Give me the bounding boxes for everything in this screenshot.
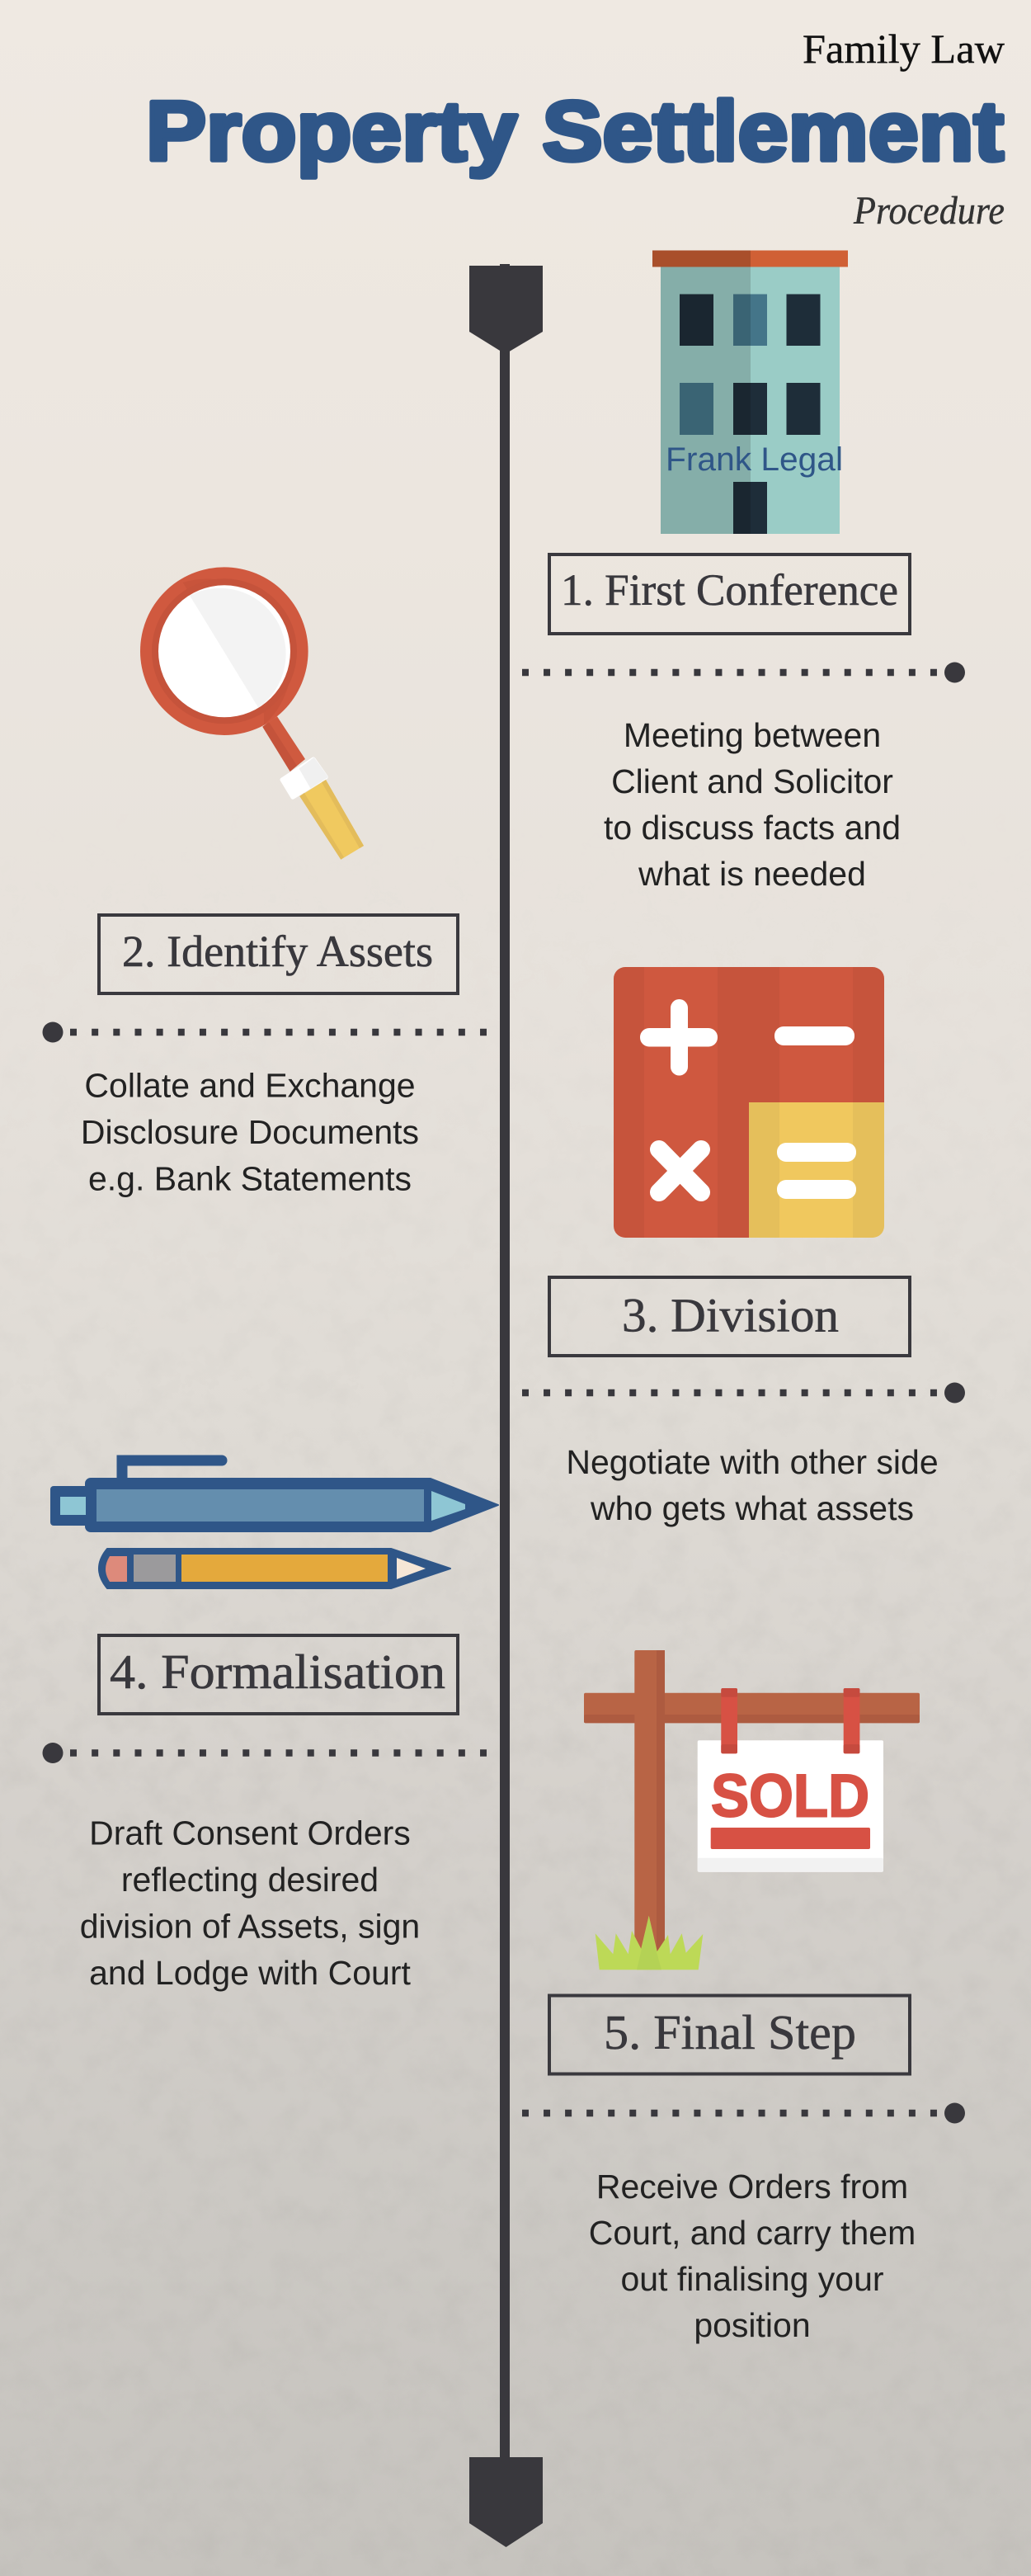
- step 5 text: position: [694, 2306, 811, 2344]
- icon: pen and pencil: [50, 1460, 498, 1588]
- step 5 connector: [522, 2102, 965, 2124]
- step 5 heading: 5. Final Step: [604, 2005, 856, 2059]
- step 4 text: [80, 1814, 420, 1992]
- step 4 connector: [43, 1743, 487, 1763]
- title: Property Settlement: [146, 84, 1004, 178]
- icon: calculator: [614, 967, 884, 1238]
- step 1 text: [604, 716, 901, 893]
- step 3 text: [566, 1443, 939, 1527]
- step 2 heading: [99, 915, 458, 993]
- step 1 heading: 1. First Conference: [561, 565, 898, 615]
- step 5 text: Court, and carry them: [589, 2214, 916, 2252]
- step 2 heading: 2. Identify Assets: [122, 927, 433, 976]
- step 3 connector: [522, 1383, 965, 1403]
- sign text: SOLD: [711, 1763, 869, 1830]
- timeline pole with arrowheads: [469, 264, 543, 2547]
- step 1 text: Client and Solicitor: [611, 762, 893, 800]
- step 4 text: Draft Consent Orders: [89, 1814, 411, 1852]
- step 4 heading: [99, 1635, 458, 1714]
- step 5 text: out finalising your: [620, 2260, 884, 2298]
- subtitle: Family Law: Family Law: [803, 26, 1005, 72]
- step 2 text: Collate and Exchange: [84, 1066, 416, 1104]
- step 2 connector: [43, 1021, 487, 1043]
- step 5 text: [589, 2168, 916, 2344]
- step 2 text: Disclosure Documents: [81, 1113, 419, 1151]
- step 5 heading: [549, 1995, 910, 2074]
- step 5 text: Receive Orders from: [596, 2168, 908, 2206]
- step 3 heading: 3. Division: [622, 1289, 839, 1342]
- step 1 connector: [522, 662, 965, 683]
- step 3 text: who gets what assets: [590, 1489, 914, 1527]
- step 4 text: and Lodge with Court: [89, 1954, 411, 1992]
- step 3 heading: [549, 1277, 910, 1356]
- step 1 text: to discuss facts and: [604, 809, 901, 847]
- step 1 text: Meeting between: [624, 716, 881, 754]
- step 2 text: e.g. Bank Statements: [88, 1160, 412, 1198]
- step 4 heading: 4. Formalisation: [110, 1644, 445, 1699]
- icon: magnifying glass: [140, 567, 364, 860]
- step 1 heading: [549, 554, 910, 634]
- step 2 text: [81, 1066, 419, 1198]
- icon: building: [652, 251, 848, 534]
- step 1 text: what is needed: [638, 855, 866, 893]
- step 4 text: reflecting desired: [121, 1861, 379, 1899]
- step 4 text: division of Assets, sign: [80, 1908, 420, 1946]
- icon: sold sign: [584, 1650, 920, 1970]
- step 3 text: Negotiate with other side: [566, 1443, 939, 1481]
- building label: Frank Legal: [666, 441, 843, 478]
- subtitle: Procedure: Procedure: [853, 189, 1005, 233]
